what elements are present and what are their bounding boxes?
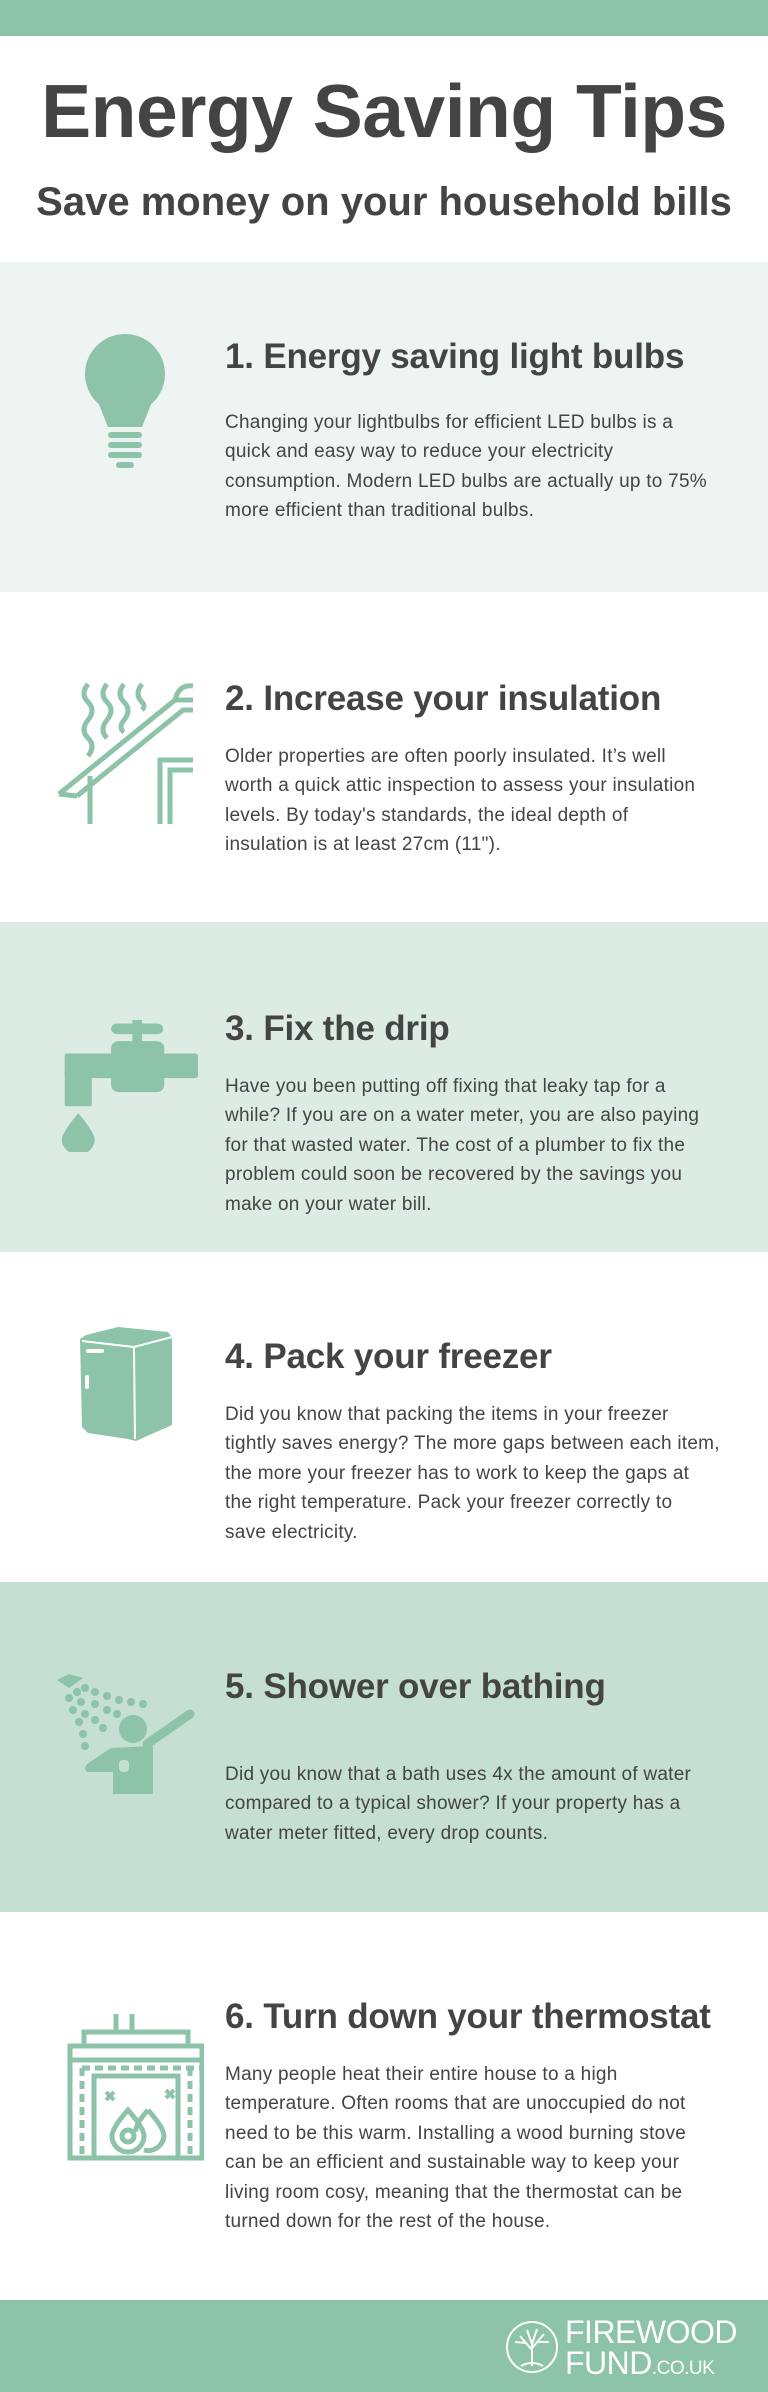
- text 4: the right temperature. Pack your freezer correctly to: [225, 1492, 672, 1513]
- title: Energy Saving Tips: [41, 69, 727, 153]
- icon: light bulb: [85, 334, 165, 468]
- icon: freezer: [80, 1327, 172, 1441]
- panel: shower: [0, 1582, 768, 1912]
- panel: freezer: [0, 1252, 768, 1582]
- text 3: Have you been putting off fixing that leaky tap for a while? If you are on a water meter, you are also paying for that wasted water. The cost of a plumber to fix the problem could soon be recovered by the savings you make on your water bill.: [225, 1076, 699, 1215]
- heading 6: 6. Turn down your thermostat: [225, 1997, 711, 2036]
- text 6: Many people heat their entire house to a high temperature. Often rooms that are unoccupied do not need to be this warm. Installing a wood burning stove can be an efficient and sustainable way to keep your living room cosy, meaning that the thermostat can be turned down for the rest of the house.: [225, 2064, 686, 2232]
- icon: roof insulation: [58, 682, 194, 824]
- heading 5: 5. Shower over bathing: [225, 1667, 606, 1706]
- logo: firewood fund: FIREWOOD: [565, 2314, 737, 2350]
- icon: tap: [62, 1020, 198, 1152]
- heading 4: 4. Pack your freezer: [225, 1337, 552, 1376]
- subtitle: Save money on your household bills: [36, 180, 732, 224]
- panel: thermostat: [0, 1912, 768, 2300]
- logo: firewood fund: FUND.CO.UK: [565, 2345, 714, 2381]
- icon: wood stove: [68, 2014, 204, 2160]
- text 4: Did you know that packing the items in your freezer: [225, 1404, 669, 1425]
- heading 3: 3. Fix the drip: [225, 1009, 450, 1048]
- text 1: Changing your lightbulbs for efficient LED bulbs is a quick and easy way to reduce your electricity consumption. Modern LED bulbs are actually up to 75% more efficient than traditional bulbs.: [225, 412, 707, 521]
- heading 2: 2. Increase your insulation: [225, 679, 661, 718]
- text 4: [225, 1404, 720, 1543]
- text 5: Did you know that a bath uses 4x the amount of water compared to a typical shower? If your property has a water meter fitted, every drop counts.: [225, 1764, 691, 1844]
- text 4: the more your freezer has to work to keep the gaps at: [225, 1463, 689, 1484]
- text 4: tightly saves energy? The more gaps between each item,: [225, 1433, 720, 1454]
- top band: [0, 0, 768, 36]
- text 4: save electricity.: [225, 1522, 358, 1543]
- icon: shower: [57, 1674, 194, 1794]
- heading 1: 1. Energy saving light bulbs: [225, 337, 684, 376]
- panel: fix the drip: [0, 922, 768, 1252]
- logo: firewood fund: [506, 2314, 737, 2381]
- icon: tree circle: [506, 2321, 558, 2373]
- panel: insulation: [0, 592, 768, 922]
- footer: [0, 2300, 768, 2392]
- panel: light bulbs: [0, 262, 768, 592]
- text 2: Older properties are often poorly insulated. It’s well worth a quick attic inspection to assess your insulation levels. By today's standards, the ideal depth of insulation is at least 27cm (11").: [225, 746, 695, 855]
